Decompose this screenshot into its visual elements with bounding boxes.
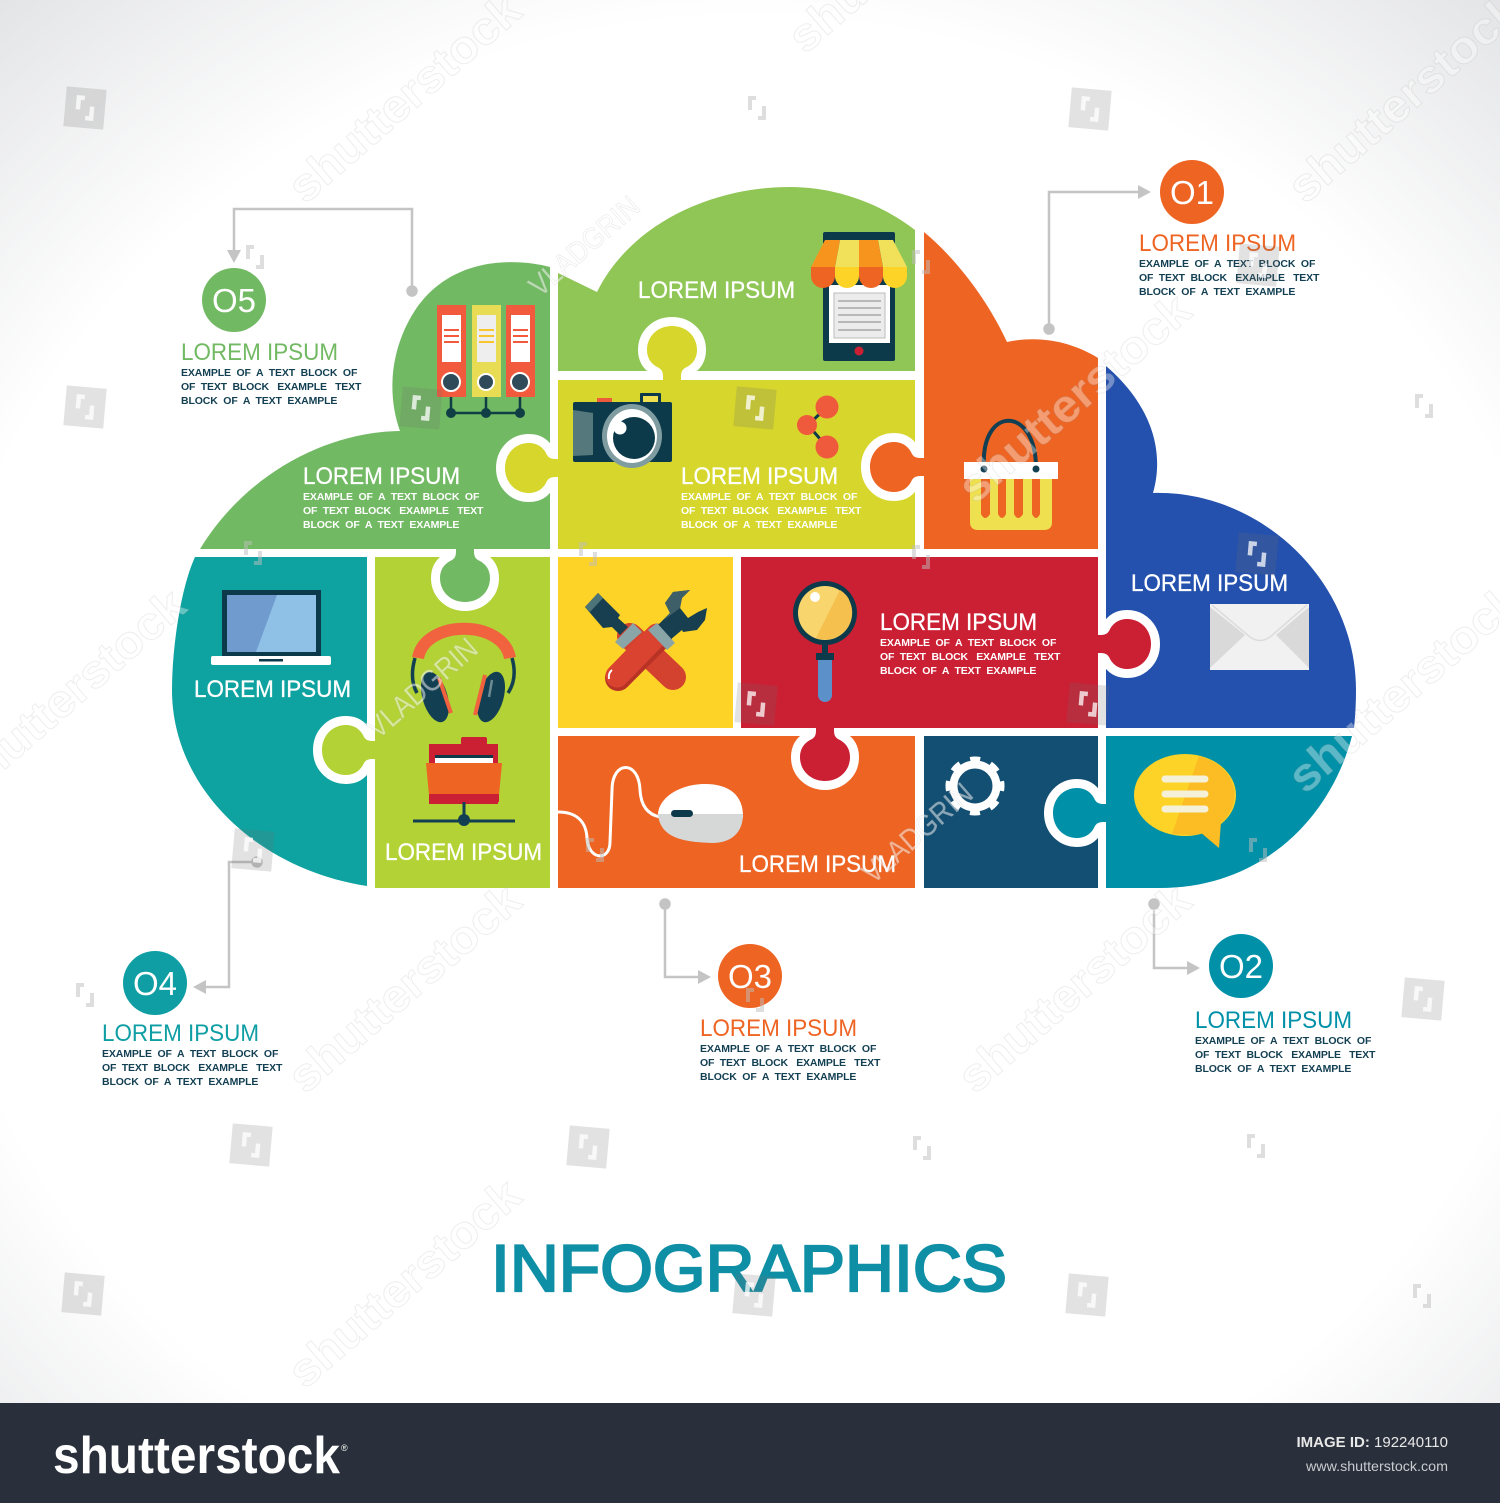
text 03: OF TEXT BLOCK EXAMPLE TEXT: [700, 1057, 881, 1069]
text 05: BLOCK OF A TEXT EXAMPLE: [181, 395, 338, 407]
text 02: LOREM IPSUM: [1195, 1007, 1352, 1034]
number badge 05: O5: [212, 282, 256, 319]
number badge 01: O1: [1170, 174, 1214, 211]
text block: red piece: LOREM IPSUM: [880, 609, 1037, 636]
watermarks: VLADGRIN: [361, 632, 484, 745]
text 03: [700, 1015, 881, 1083]
piece: light green top: [558, 187, 915, 371]
text block: red piece: BLOCK OF A TEXT EXAMPLE: [880, 665, 1037, 677]
title: INFOGRAPHICS: [491, 1231, 1007, 1305]
number badge 05: [202, 268, 266, 332]
icon: envelope: [1210, 604, 1309, 670]
text 03: EXAMPLE OF A TEXT BLOCK OF: [700, 1043, 877, 1055]
text block: red piece: OF TEXT BLOCK EXAMPLE TEXT: [880, 651, 1061, 663]
number badge 03: O3: [728, 958, 772, 995]
number badge 04: [123, 951, 187, 1015]
knob: red into orange: [800, 724, 850, 781]
text 05: LOREM IPSUM: [181, 339, 338, 366]
footer logo: shutterstock: [53, 1427, 340, 1485]
label: mouse: LOREM IPSUM: [739, 851, 896, 878]
text 04: EXAMPLE OF A TEXT BLOCK OF: [102, 1048, 279, 1060]
footer url: www.shutterstock.com: [1305, 1458, 1448, 1474]
icon: magnifier: [793, 581, 857, 702]
piece: orange basket: [924, 232, 1098, 549]
knob: teal into navy: [1053, 788, 1110, 838]
piece: red magnifier: [741, 557, 1098, 728]
icon: gear: [948, 759, 1002, 813]
text block: green piece: BLOCK OF A TEXT EXAMPLE: [303, 519, 460, 531]
callout 01: [1044, 160, 1320, 334]
text 05: EXAMPLE OF A TEXT BLOCK OF: [181, 367, 358, 379]
text block: green piece: [303, 463, 484, 531]
watermarks: shutterstock: [947, 873, 1201, 1103]
arrow: to 03: [660, 900, 711, 984]
text block: red piece: EXAMPLE OF A TEXT BLOCK OF: [880, 637, 1057, 649]
piece: teal laptop: [172, 557, 367, 886]
knob: camera piece into top green: [647, 326, 697, 383]
text block: green piece: OF TEXT BLOCK EXAMPLE TEXT: [303, 505, 484, 517]
footer registered mark: ®: [341, 1443, 348, 1453]
text block: green piece: EXAMPLE OF A TEXT BLOCK OF: [303, 491, 480, 503]
icon: headphones: [413, 629, 514, 725]
arrow: to 02: [1150, 900, 1200, 975]
text block: camera piece: LOREM IPSUM: [681, 463, 838, 490]
label: laptop: LOREM IPSUM: [194, 676, 351, 703]
icon: basket: [964, 421, 1058, 530]
cloud puzzle: [172, 187, 1356, 888]
callout 05: [181, 209, 416, 407]
text block: red piece: [880, 609, 1061, 677]
text 01: OF TEXT BLOCK EXAMPLE TEXT: [1139, 272, 1320, 284]
icon: camera: [573, 393, 672, 468]
icon: crossed tools: [585, 590, 707, 679]
text 01: [1139, 230, 1320, 298]
watermarks: shutterstock: [277, 1168, 531, 1398]
callout 02: [1150, 900, 1376, 1075]
arrow: to 01: [1044, 185, 1151, 334]
number badge 02: O2: [1219, 948, 1263, 985]
icon: folder network: [413, 737, 515, 826]
number badge 02: [1209, 934, 1273, 998]
label: blue: LOREM IPSUM: [1131, 570, 1288, 597]
text block: camera piece: BLOCK OF A TEXT EXAMPLE: [681, 519, 838, 531]
watermarks: shutterstock: [277, 873, 531, 1103]
knob: orange into camera piece: [870, 442, 927, 492]
piece: green upper left: [200, 262, 550, 549]
knob: green into lime: [440, 545, 490, 602]
label: lime: LOREM IPSUM: [385, 839, 542, 866]
piece: teal chat: [1106, 736, 1352, 888]
text 03: BLOCK OF A TEXT EXAMPLE: [700, 1071, 857, 1083]
text 05: [181, 339, 362, 407]
text 04: LOREM IPSUM: [102, 1020, 259, 1047]
text 01: BLOCK OF A TEXT EXAMPLE: [1139, 286, 1296, 298]
footer image id: IMAGE ID: 192240110: [1297, 1434, 1448, 1451]
icon: tablet shop: [811, 232, 907, 361]
icon: laptop: [211, 590, 331, 665]
knob: lime into teal: [322, 725, 379, 775]
text 02: OF TEXT BLOCK EXAMPLE TEXT: [1195, 1049, 1376, 1061]
text 04: OF TEXT BLOCK EXAMPLE TEXT: [102, 1062, 283, 1074]
labels inside cloud: [194, 277, 1288, 878]
icon: binders: [437, 305, 535, 418]
text 02: EXAMPLE OF A TEXT BLOCK OF: [1195, 1035, 1372, 1047]
piece: yellow tools: [558, 557, 733, 728]
number badge 01: [1160, 160, 1224, 224]
icon: share: [797, 396, 838, 458]
text 02: [1195, 1007, 1376, 1075]
arrow: to 05: [227, 209, 416, 296]
text block: green piece: LOREM IPSUM: [303, 463, 460, 490]
label: top green: LOREM IPSUM: [638, 277, 795, 304]
knob: red into blue: [1094, 619, 1151, 669]
piece: blue envelope: [1106, 366, 1356, 728]
arrow: to 04: [193, 858, 262, 994]
icon: chat bubble: [1134, 754, 1236, 848]
piece: lime headphones: [375, 557, 550, 888]
piece: yellow green camera: [558, 380, 915, 549]
text 04: BLOCK OF A TEXT EXAMPLE: [102, 1076, 259, 1088]
piece: navy gear: [924, 736, 1098, 888]
number badge 03: [718, 944, 782, 1008]
knob: camera piece into green: [505, 443, 562, 493]
text block: camera piece: EXAMPLE OF A TEXT BLOCK OF: [681, 491, 858, 503]
callout 03: [660, 900, 881, 1083]
text 03: LOREM IPSUM: [700, 1015, 857, 1042]
text 04: [102, 1020, 283, 1088]
number badge 04: O4: [133, 965, 177, 1002]
text block: camera piece: OF TEXT BLOCK EXAMPLE TEXT: [681, 505, 862, 517]
callout 04: [102, 858, 283, 1088]
icon: mouse: [558, 768, 743, 856]
footer bar: [0, 1403, 1500, 1503]
text 02: BLOCK OF A TEXT EXAMPLE: [1195, 1063, 1352, 1075]
text block: camera piece: [681, 463, 862, 531]
text 05: OF TEXT BLOCK EXAMPLE TEXT: [181, 381, 362, 393]
watermarks: shutterstock: [947, 283, 1201, 513]
watermarks: VLADGRIN: [523, 190, 646, 303]
text 01: LOREM IPSUM: [1139, 230, 1296, 257]
text 01: EXAMPLE OF A TEXT BLOCK OF: [1139, 258, 1316, 270]
piece: orange mouse: [558, 736, 915, 888]
watermarks: VLADGRIN: [856, 777, 979, 890]
